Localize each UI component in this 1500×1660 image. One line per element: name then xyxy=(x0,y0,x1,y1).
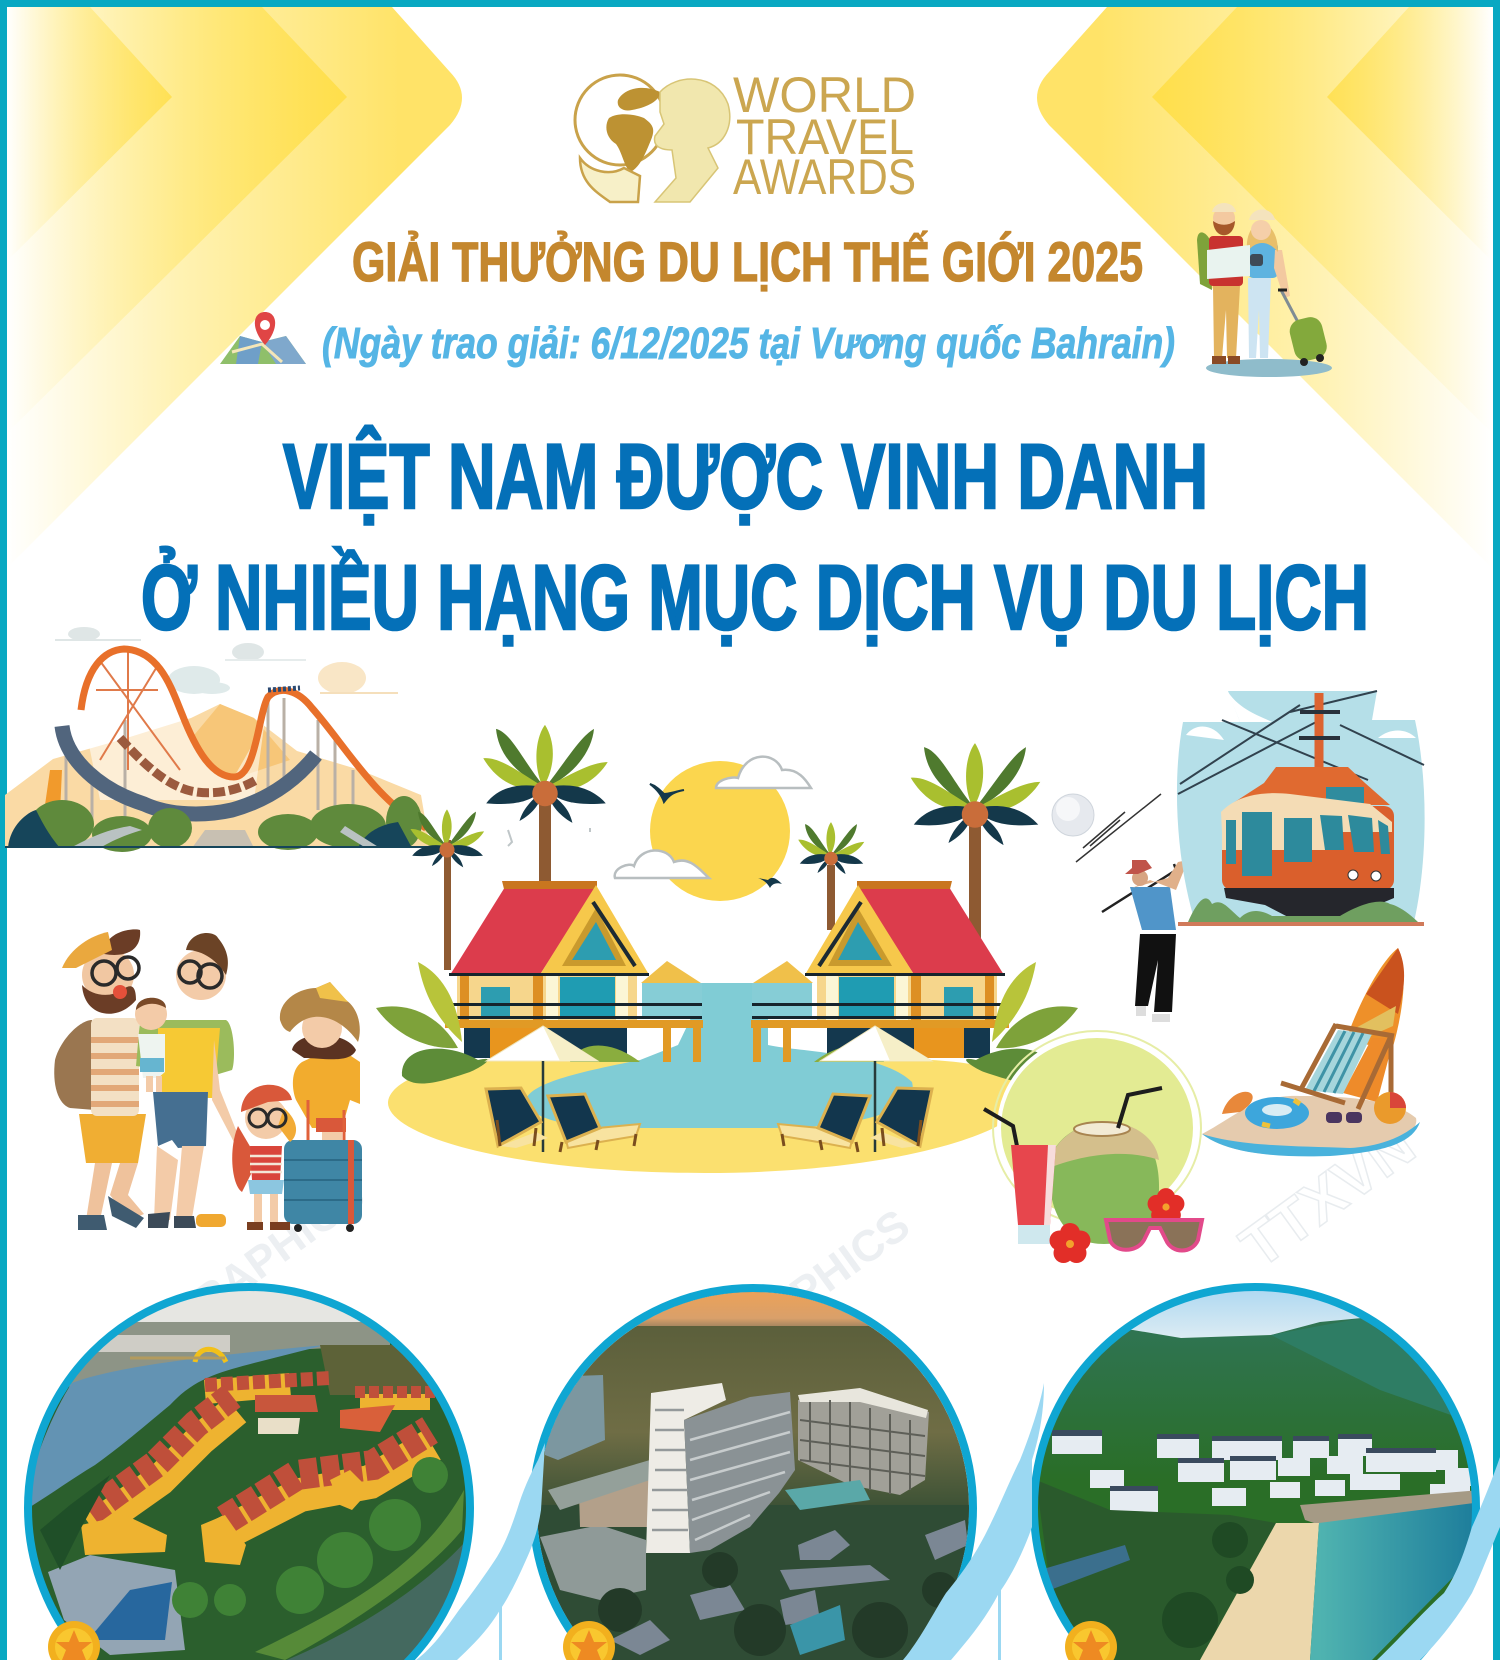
tram body xyxy=(1230,767,1390,805)
illustration: cable car xyxy=(1177,691,1425,926)
illustration: family with luggage xyxy=(54,929,362,1232)
illustration: beach resort scene xyxy=(376,725,1078,1173)
swim ring xyxy=(1245,1097,1309,1129)
faint watermark xyxy=(72,1111,1427,1438)
logo wordmark xyxy=(733,67,916,205)
halo xyxy=(999,1036,1195,1220)
palm trees xyxy=(410,725,1040,970)
faint watermark: INFOGRAPHICS xyxy=(617,1200,919,1438)
logo: World Travel Awards xyxy=(575,67,916,205)
photo circle: mountainside villas and bay xyxy=(1030,1280,1480,1660)
subheading: award date and place: (Ngày trao giải: 6/12/2025 tại Vương quốc Bahrain) xyxy=(322,319,1175,368)
cable car sky panel xyxy=(1177,691,1425,922)
little girl with helmet xyxy=(196,1085,296,1230)
illustration: golfer xyxy=(1102,860,1188,1022)
icon: map pin xyxy=(220,312,306,364)
sunglasses xyxy=(1106,1220,1202,1250)
resort clouds and birds xyxy=(508,757,811,888)
photo circle: beachfront hotel towers xyxy=(530,1280,980,1660)
tram ground bushes xyxy=(1188,898,1418,922)
hibiscus flowers xyxy=(1050,1223,1090,1263)
medal 2 xyxy=(563,1621,615,1660)
medal 3 xyxy=(1065,1621,1117,1660)
medal 1 xyxy=(48,1621,100,1660)
illustration: golf ball and swing lines xyxy=(1052,794,1161,862)
coconut xyxy=(1049,1122,1159,1244)
left yellow chevrons xyxy=(7,7,462,568)
right bungalow xyxy=(751,881,1078,1084)
illustration: beach chair and surfboard xyxy=(1202,948,1420,1156)
logo wordmark: WORLD xyxy=(733,67,916,123)
heading: award name: GIẢI THƯỞNG DU LỊCH THẾ GIỚI 2025 xyxy=(352,230,1143,293)
logo emblem: globe and face xyxy=(575,75,730,202)
lagoon water xyxy=(526,983,913,1128)
faint watermark: TTXVN xyxy=(1228,1111,1427,1281)
surfboard xyxy=(1346,948,1404,1050)
illustration: coconut drink xyxy=(984,1031,1202,1263)
suitcase xyxy=(284,1100,362,1232)
medal icons xyxy=(48,1621,1117,1660)
island and water xyxy=(1202,1096,1416,1156)
cable wires xyxy=(1178,691,1424,794)
beach sand xyxy=(388,1059,1028,1173)
straws xyxy=(1118,1088,1162,1128)
logo wordmark: TRAVEL xyxy=(736,109,914,165)
main title xyxy=(141,425,1369,649)
older daughter with hat xyxy=(280,982,360,1160)
glass of juice xyxy=(1011,1145,1056,1225)
illustration: traveling couple xyxy=(1197,203,1332,377)
deck chair xyxy=(1343,1038,1394,1102)
logo wordmark: AWARDS xyxy=(733,149,916,205)
faint watermark: INFOGRAPHICS xyxy=(72,1170,374,1408)
left bungalow xyxy=(376,881,703,1084)
photo circle: riverside heritage resort xyxy=(20,1280,480,1660)
sun xyxy=(650,761,790,901)
right yellow chevrons xyxy=(1037,7,1492,568)
father xyxy=(54,929,146,1230)
coaster clouds xyxy=(55,627,398,694)
beach ball, sandals and shades xyxy=(1374,1092,1406,1124)
umbrellas xyxy=(486,1026,932,1152)
blue ribbon decorations xyxy=(416,1383,1500,1660)
mother and baby xyxy=(135,933,240,1228)
sun loungers xyxy=(486,1088,932,1152)
hanger xyxy=(1314,693,1324,770)
illustration: roller coaster xyxy=(5,627,430,852)
